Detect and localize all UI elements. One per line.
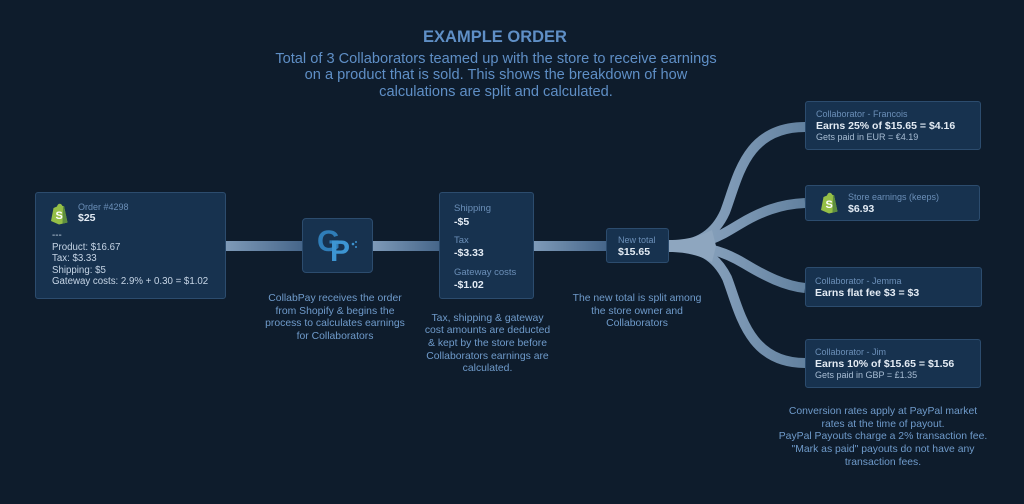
caption: deductions: Tax, shipping & gateway	[431, 312, 544, 324]
Jim earnings: Gets paid in GBP = £1.35	[815, 370, 917, 380]
icon: shopify bag	[821, 192, 838, 214]
subtitle text	[275, 50, 717, 100]
store earnings value: Store earnings (keeps)	[848, 192, 939, 202]
caption: new total: The new total is split among	[573, 293, 701, 304]
subtitle text: calculations are split and calculated.	[379, 84, 613, 100]
Jim earnings	[815, 347, 954, 380]
caption: CollabPay: for Collaborators	[297, 331, 373, 342]
tax deduction	[454, 235, 484, 259]
caption: deductions: calculated.	[463, 363, 512, 374]
new total value: New total	[618, 234, 656, 244]
gateway deduction: Gateway costs	[454, 266, 516, 278]
note: conversion rates: Conversion rates apply at PayPal market	[789, 406, 977, 417]
Jim earnings: Collaborator - Jim	[815, 347, 886, 357]
subtitle text: on a product that is sold. This shows the breakdown of how	[305, 67, 687, 83]
Francois earnings: Gets paid in EUR = €4.19	[816, 132, 918, 142]
Francois earnings: Collaborator - Francois	[816, 109, 908, 119]
shipping deduction: Shipping	[454, 203, 491, 214]
icon: CP logo: G	[317, 225, 340, 258]
caption: CollabPay	[265, 293, 405, 342]
panel: Jemma	[805, 267, 982, 307]
caption: deductions: Collaborators earnings are	[426, 351, 549, 362]
order breakdown: ---	[52, 230, 62, 241]
caption: deductions: cost amounts are deducted	[425, 325, 550, 336]
Jemma earnings: Earns flat fee $3 = $3	[815, 287, 919, 299]
panel: store earnings	[805, 185, 980, 221]
caption: deductions	[425, 312, 550, 374]
caption: new total: Collaborators	[606, 318, 668, 329]
Jemma earnings: Collaborator - Jemma	[815, 276, 902, 286]
caption: new total: the store owner and	[591, 306, 683, 317]
panel: CollabPay logo	[302, 218, 373, 273]
panel: deductions	[439, 192, 534, 299]
shipping deduction: -$5	[454, 216, 469, 228]
Francois earnings	[816, 109, 955, 142]
order breakdown: Gateway costs: 2.9% + 0.30 = $1.02	[52, 276, 208, 287]
caption: CollabPay: process to calculates earnings	[265, 318, 405, 329]
gateway deduction	[454, 266, 516, 291]
new total value: $15.65	[618, 246, 650, 258]
Jim earnings: Earns 10% of $15.65 = $1.56	[815, 358, 954, 370]
icon: shopify bag: S	[56, 210, 63, 222]
order breakdown: Product: $16.67	[52, 242, 120, 253]
note: conversion rates: PayPal Payouts charge a 2% transaction fee.	[779, 431, 987, 442]
Francois earnings: Earns 25% of $15.65 = $4.16	[816, 120, 955, 132]
note: conversion rates: transaction fees.	[845, 457, 921, 468]
title: EXAMPLE ORDER	[423, 28, 567, 46]
icon: shopify bag: S	[826, 199, 833, 211]
Jemma earnings	[815, 276, 919, 299]
caption: CollabPay: CollabPay receives the order	[268, 293, 402, 304]
note: conversion rates	[779, 406, 987, 468]
note: conversion rates: "Mark as paid" payouts do not have any	[792, 444, 974, 455]
tax deduction: -$3.33	[454, 247, 484, 259]
order breakdown: Shipping: $5	[52, 265, 106, 276]
icon: shopify bag	[51, 204, 68, 224]
note: conversion rates: rates at the time of payout.	[821, 419, 945, 430]
gateway deduction: -$1.02	[454, 279, 484, 291]
order breakdown: Tax: $3.33	[52, 253, 97, 264]
icon: CP logo	[317, 225, 357, 267]
order breakdown	[52, 230, 208, 287]
caption: deductions: & kept by the store before	[428, 338, 547, 349]
order heading: Order #4298	[78, 202, 129, 212]
shipping deduction	[454, 203, 491, 228]
order heading: $25	[78, 212, 96, 224]
new total value	[618, 234, 656, 258]
store earnings value	[848, 192, 939, 215]
caption: CollabPay: from Shopify & begins the	[276, 306, 394, 317]
order heading	[78, 202, 129, 224]
panel: Jim	[805, 339, 981, 388]
caption: new total	[572, 293, 701, 329]
store earnings value: $6.93	[848, 203, 874, 215]
tax deduction: Tax	[454, 235, 469, 246]
panel: new total	[606, 228, 669, 263]
panel: order	[35, 192, 226, 299]
subtitle text: Total of 3 Collaborators teamed up with the store to receive earnings	[275, 50, 717, 66]
panel: Francois	[805, 101, 981, 150]
